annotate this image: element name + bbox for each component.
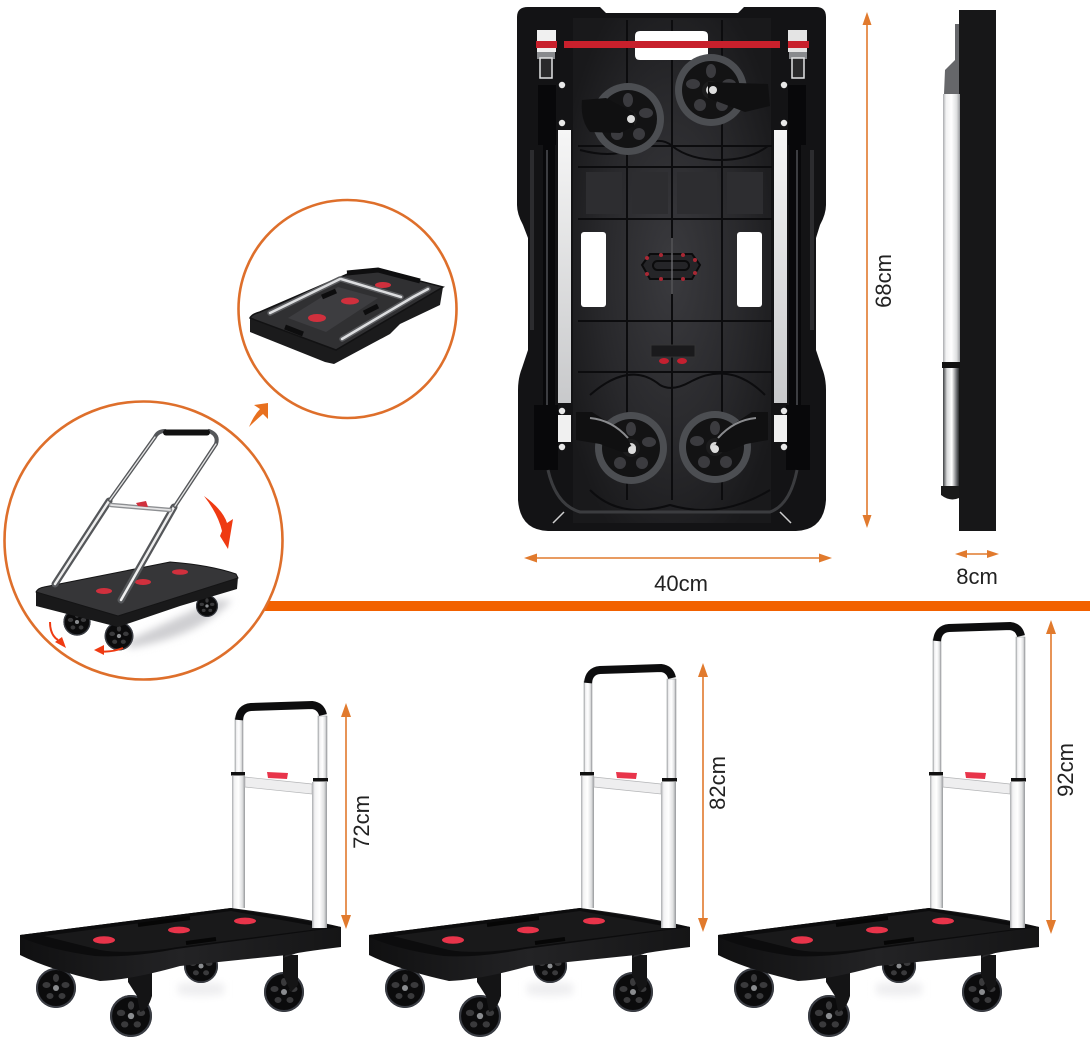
dimension: 82cm [698, 663, 730, 932]
aluminium rods [558, 130, 571, 403]
wheel forks [576, 82, 770, 452]
dimension: 82cm: 82cm [705, 756, 730, 810]
dimension: depth 8cm [955, 550, 999, 589]
dimension: 72cm: 72cm [349, 795, 374, 849]
dimension: 92cm [1046, 620, 1078, 934]
handle [929, 626, 1026, 928]
center hub [642, 254, 700, 279]
deck outline [517, 7, 826, 531]
side view deck [959, 10, 996, 531]
icon: small orange arrow [249, 403, 268, 427]
corner white pads [537, 30, 556, 52]
dimension: width 40cm: 40cm [654, 571, 708, 596]
handle slot [635, 31, 708, 60]
cart: 92cm height [718, 626, 1039, 1037]
dimension: length 68cm [862, 12, 896, 528]
side hand slots [581, 232, 606, 307]
handle [231, 705, 328, 928]
floor shadow [125, 600, 232, 648]
wheels, underside [592, 54, 751, 484]
red bar [564, 41, 780, 48]
red curved arrows: wheels [50, 622, 123, 652]
handle [580, 668, 677, 928]
panel: underside view of folded cart [517, 7, 826, 531]
circle: folded cart [238, 200, 456, 418]
folded grip [347, 270, 420, 281]
folding cart handle [55, 431, 217, 600]
cart: 72cm height [20, 705, 341, 1037]
dimension: width 40cm [524, 554, 832, 596]
folding cart wheels [63, 595, 218, 650]
circle: cart folding [4, 402, 282, 680]
dimension: 72cm [341, 703, 374, 929]
folded cart platform [250, 287, 443, 364]
panel: side view of folded cart [941, 10, 996, 531]
side view hinge [944, 24, 959, 94]
bolts [559, 82, 787, 450]
dimension: depth 8cm: 8cm [956, 564, 998, 589]
cart: 82cm height [369, 668, 690, 1037]
spring wire [548, 470, 797, 512]
hinges [537, 52, 807, 59]
folded handle [270, 279, 428, 339]
dimension: length 68cm: 68cm [871, 254, 896, 308]
side view tube [943, 94, 960, 362]
folding cart platform [36, 577, 238, 627]
divider line [265, 601, 1090, 611]
red curved arrow: fold [204, 496, 233, 549]
dimension: 92cm: 92cm [1053, 743, 1078, 797]
side frame rails [534, 85, 810, 470]
